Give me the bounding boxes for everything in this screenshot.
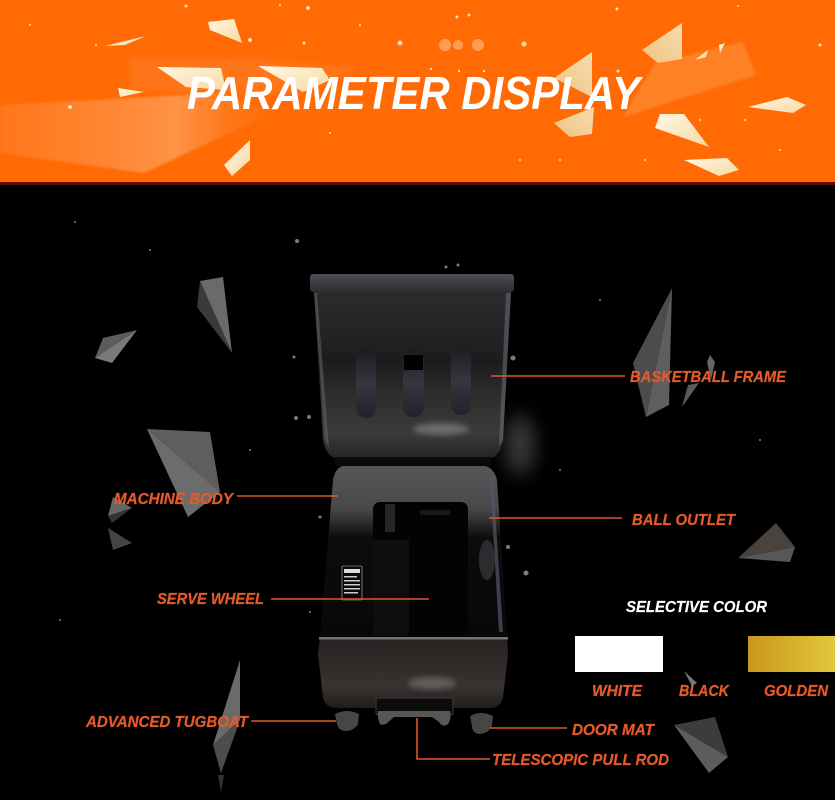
banner paper shards [105,19,806,176]
callout: basketball frame: BASKETBALL FRAME [630,369,787,386]
floating grey shards [95,277,795,792]
machine: base [318,637,508,708]
callout: door mat: DOOR MAT [572,722,655,739]
callout: advanced tugboat: ADVANCED TUGBOAT [85,714,249,731]
frame slots [356,347,471,418]
title: PARAMETER DISPLAY [187,67,644,119]
callout: telescopic pull rod [417,718,669,769]
window [373,502,468,635]
callout: machine body: MACHINE BODY [114,491,234,508]
callout: telescopic pull rod: TELESCOPIC PULL ROD [492,752,669,769]
callout: serve wheel: SERVE WHEEL [157,591,264,608]
color option: golden: GOLDEN [764,683,828,700]
callout: ball outlet: BALL OUTLET [632,512,736,529]
background dust and sparkles [59,221,761,621]
heading: selective color: SELECTIVE COLOR [626,599,767,616]
color option: white: WHITE [592,683,643,700]
color option: black [663,636,748,700]
machine: lower body [320,466,507,636]
color option: black: BLACK [679,683,730,700]
orange banner [0,0,835,185]
color option: white [575,636,663,700]
frame rim [310,274,514,292]
machine: telescopic handle [376,698,453,726]
machine: feet [335,711,493,734]
rating label [342,566,362,600]
machine: basketball frame [310,274,514,466]
color option: golden [748,636,835,700]
